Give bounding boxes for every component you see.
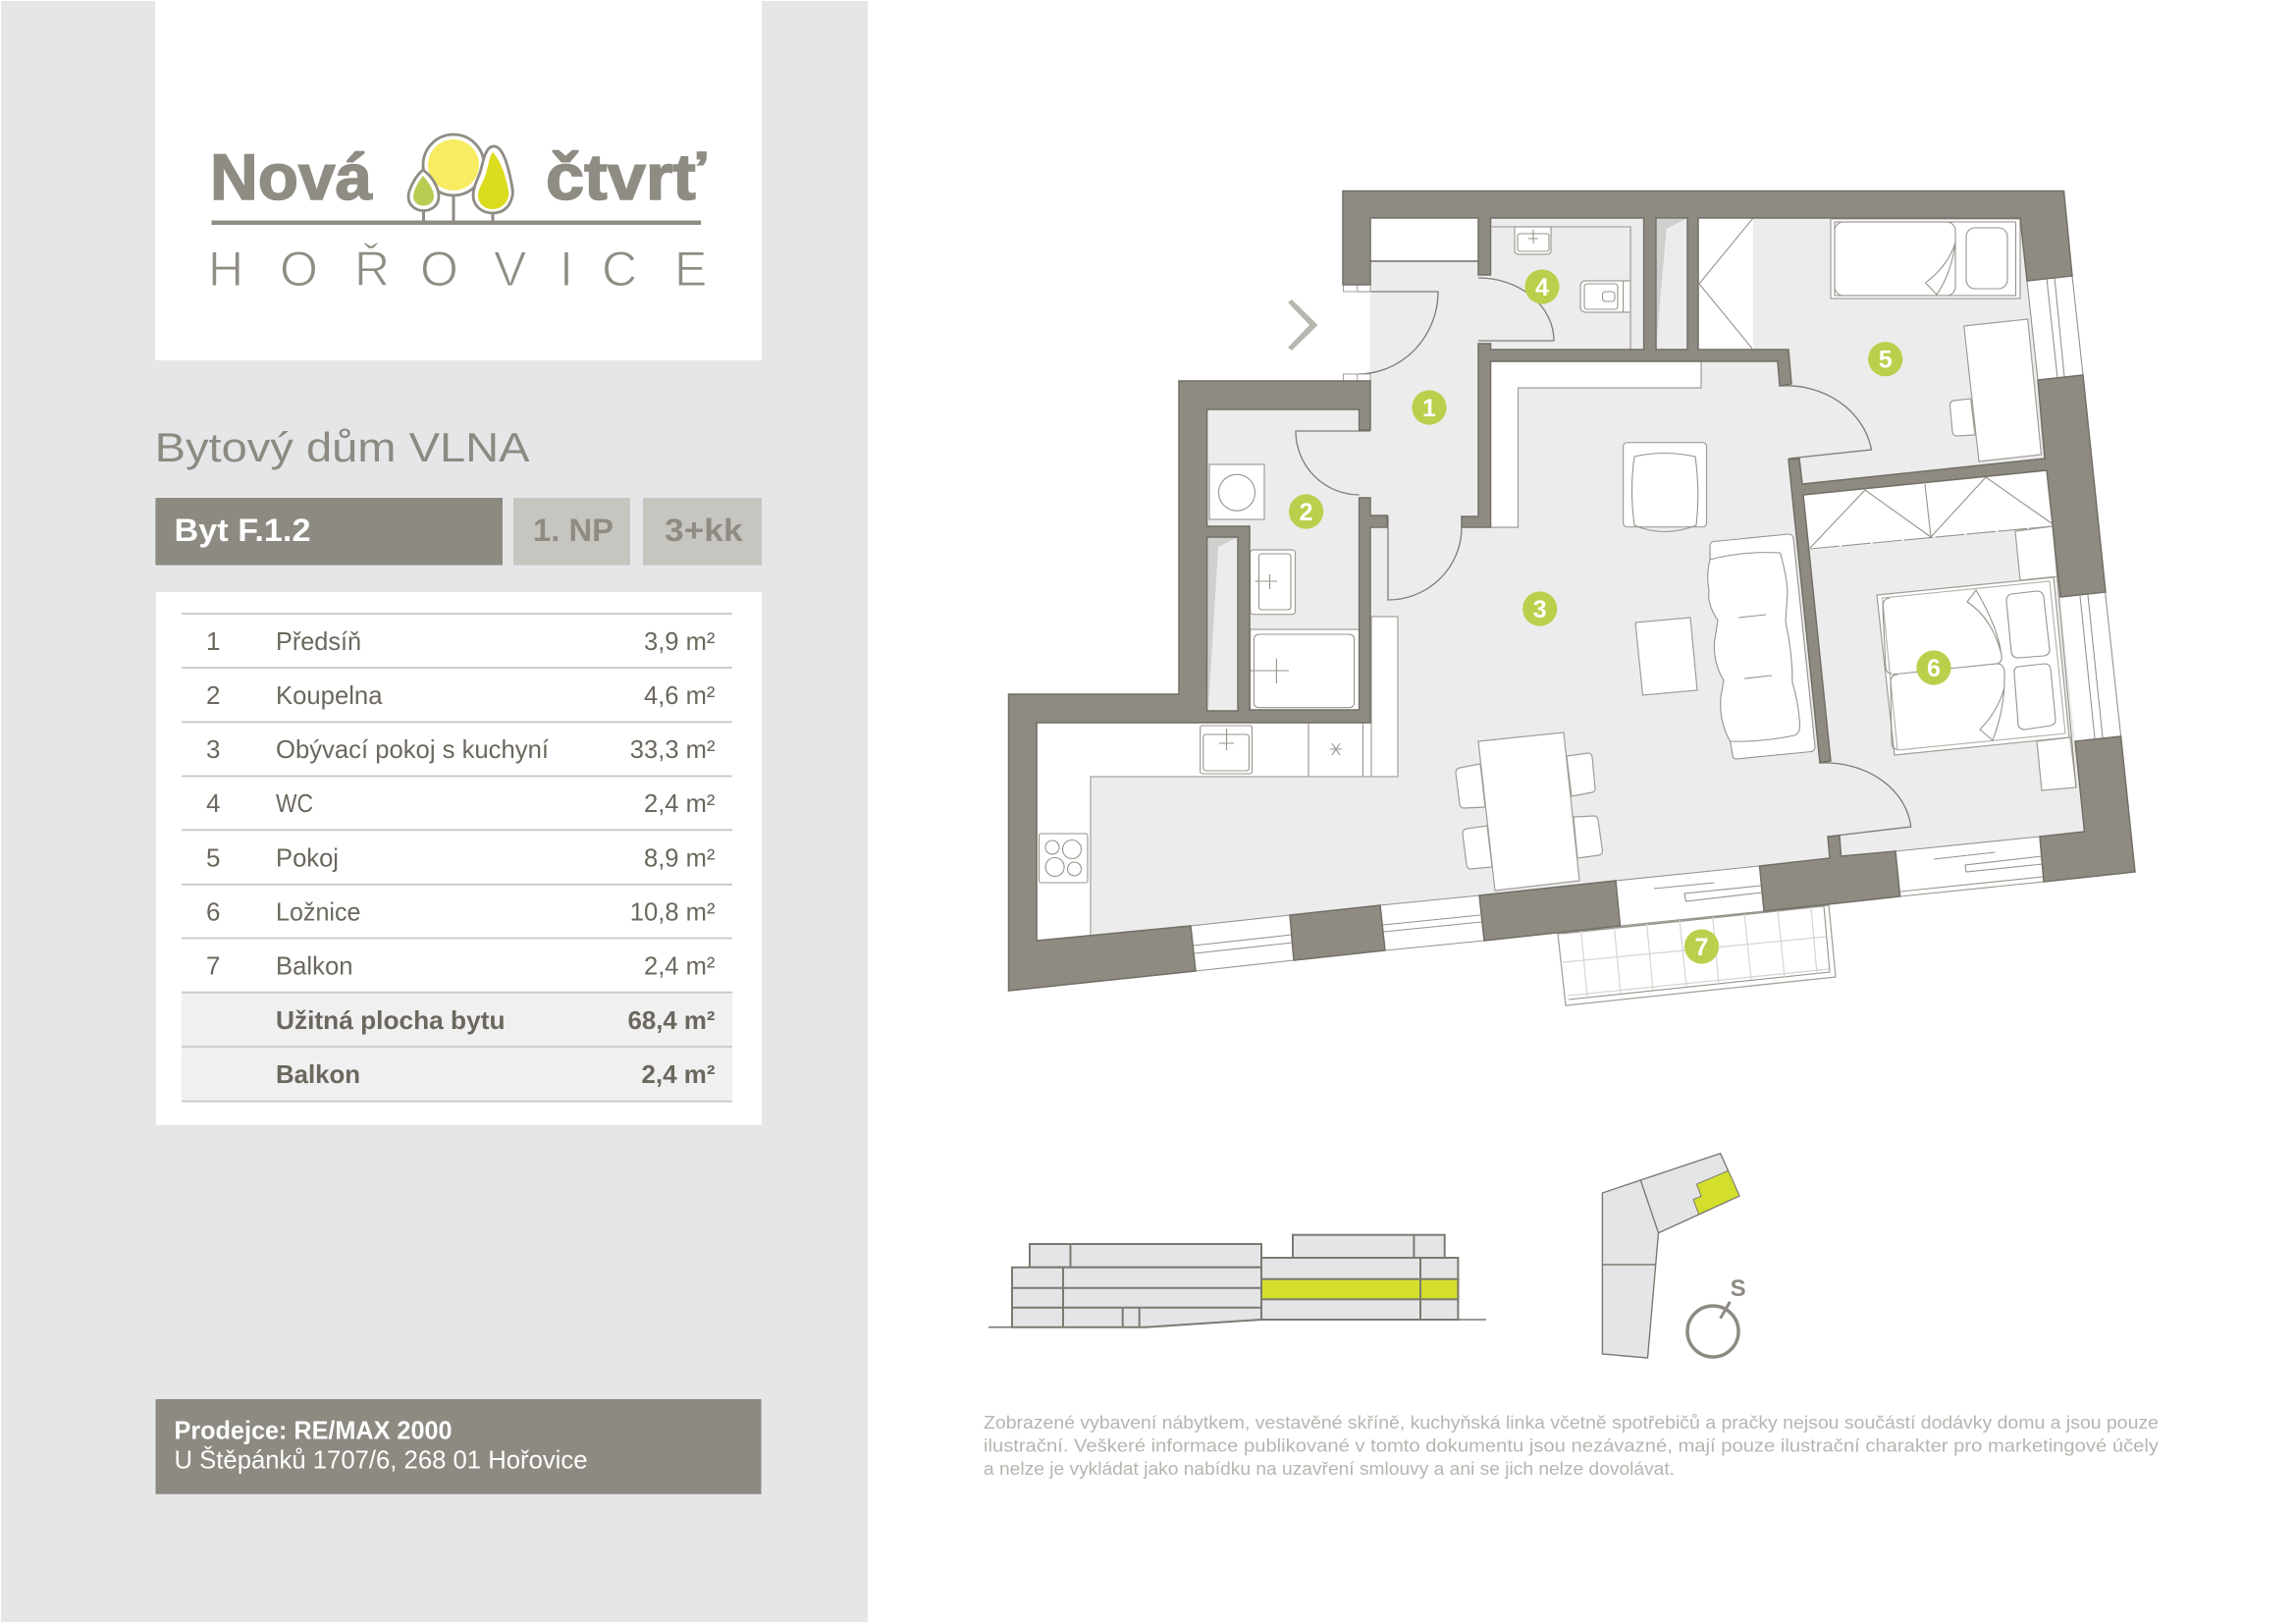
- panel: left sidebar background: [1, 1, 868, 1622]
- floor tag: 1. NP: [533, 513, 614, 548]
- room badge 1: 1: [1422, 395, 1436, 422]
- living room door: [1388, 515, 1462, 600]
- table row 2: Koupelna: [276, 680, 383, 710]
- table row 4: WC: [276, 788, 313, 818]
- table row 1: Předsíň: [276, 626, 361, 656]
- room badge 2: 2: [1300, 499, 1313, 526]
- logo rule: [212, 220, 701, 225]
- disclaimer text: [984, 1412, 2160, 1479]
- panel: seller contact: Prodejce: RE/MAX 2000: [175, 1416, 452, 1445]
- apartment name bar: [155, 498, 503, 566]
- table total: balcony: 2,4 m²: [642, 1059, 716, 1089]
- floor plan: [1009, 190, 2135, 1005]
- room badge 6: [1916, 650, 1951, 685]
- table row 6: [206, 897, 716, 927]
- panel: seller contact: [155, 1399, 762, 1494]
- table row 7: [206, 950, 716, 980]
- room badge 6: 6: [1927, 655, 1941, 682]
- logo word: Hořovice: HOŘOVICE: [208, 242, 707, 297]
- table row 7: 2,4 m²: [644, 950, 716, 980]
- table total: usable area: Užitná plocha bytu: [276, 1005, 505, 1035]
- room badge 3: [1522, 591, 1557, 626]
- shaft fill: [1207, 219, 1686, 710]
- toilet: [1580, 281, 1630, 312]
- room 5 wardrobe: [1698, 218, 1753, 350]
- living room sofa: [1708, 534, 1815, 759]
- layout tag: 3+kk: [665, 513, 743, 548]
- kitchen sink: [1201, 726, 1253, 774]
- room 6 wardrobe: [1803, 471, 2053, 550]
- disclaimer text: ilustrační. Veškeré informace publikované v tomto dokumentu jsou nezávazné, mají pouze ilustrační charakter pro marketingové účely: [984, 1435, 2160, 1455]
- balcony: [1558, 905, 1836, 1005]
- table row 6: 6: [206, 897, 220, 927]
- disclaimer text: a nelze je vykládat jako nabídku na uzavření smlouvy a ani se jich nelze dovolávat.: [984, 1458, 1675, 1479]
- table row 3: [206, 734, 716, 764]
- disclaimer text: Zobrazené vybavení nábytkem, vestavěné skříně, kuchyňská linka včetně spotřebičů a pračky nejsou součástí dodávky domu a jsou pouze: [984, 1412, 2159, 1433]
- table row 5: 8,9 m²: [644, 842, 716, 872]
- kitchen cooktop: [1039, 834, 1088, 883]
- table row 3: Obývací pokoj s kuchyní: [276, 734, 550, 764]
- table row 1: [206, 626, 716, 656]
- table row 7: Balkon: [276, 950, 353, 980]
- table row 2: 4,6 m²: [644, 680, 716, 710]
- room 5 bed: [1831, 219, 2020, 298]
- icon: north compass: [1687, 1275, 1746, 1357]
- bedroom door: [1820, 763, 1911, 837]
- kitchen appliance symbol: [1330, 743, 1342, 755]
- floor tag: [513, 498, 630, 566]
- panel: seller contact: U Štěpánků 1707/6, 268 01 Hořovice: [175, 1445, 587, 1475]
- table total: usable area: 68,4 m²: [628, 1005, 716, 1035]
- icon: trees: [408, 135, 512, 222]
- table row 1: 1: [206, 626, 220, 656]
- room 5 door: [1781, 386, 1871, 459]
- room 6 bedroom furniture: [1877, 526, 2076, 790]
- floor area: [1037, 218, 2085, 941]
- icon: entrance arrow: [1288, 299, 1317, 351]
- room badge 5: 5: [1879, 347, 1893, 374]
- windows: [1191, 276, 2121, 971]
- entrance door: [1343, 285, 1438, 381]
- room badge 7: 7: [1695, 934, 1708, 961]
- table row 6: Ložnice: [276, 897, 361, 927]
- logo word: Nová: Nová: [210, 140, 372, 213]
- table row 4: [206, 788, 716, 818]
- doors: [1296, 278, 1911, 837]
- table total: usable area: [276, 1005, 716, 1035]
- room badge 5: [1868, 342, 1902, 376]
- icon: north compass: S: [1731, 1275, 1746, 1302]
- washing machine: [1209, 464, 1264, 519]
- room badge 2: [1289, 494, 1323, 529]
- room 5 desk and chair: [1949, 319, 2042, 461]
- living room coffee table: [1635, 618, 1697, 695]
- table row 5: Pokoj: [276, 842, 339, 872]
- bathroom door: [1296, 431, 1370, 495]
- WC door: [1478, 278, 1554, 341]
- site plan with highlighted apartment: [1602, 1154, 1739, 1358]
- table row 2: 2: [206, 680, 220, 710]
- table row 4: 2,4 m²: [644, 788, 716, 818]
- building elevation diagram: [988, 1235, 1486, 1327]
- shower tray: [1251, 629, 1360, 711]
- table row 1: 3,9 m²: [644, 626, 716, 656]
- layout tag: [643, 498, 762, 566]
- bathroom fixtures: [1209, 464, 1360, 711]
- room badge 4: [1524, 269, 1560, 304]
- logo word: čtvrť: čtvrť: [546, 140, 706, 213]
- table row 3: 33,3 m²: [630, 734, 716, 764]
- double bed: [1877, 577, 2069, 755]
- table row 5: [206, 842, 716, 872]
- room badge 3: 3: [1533, 596, 1547, 623]
- apartment name bar: Byt F.1.2: [175, 513, 310, 548]
- panel: logo: [155, 0, 762, 360]
- heading: building name: Bytový dům VLNA: [155, 424, 530, 470]
- table row 7: 7: [206, 950, 220, 980]
- table total: balcony: [276, 1059, 716, 1089]
- bathroom basin: [1251, 550, 1296, 615]
- room badge 1: [1412, 390, 1447, 425]
- table total: balcony: Balkon: [276, 1059, 360, 1089]
- table row 4: 4: [206, 788, 220, 818]
- table row 5: 5: [206, 842, 220, 872]
- panel: room area table: [156, 592, 762, 1125]
- walls: [1009, 190, 2135, 991]
- dining table and chairs: [1456, 732, 1602, 891]
- living room armchair: [1624, 443, 1706, 532]
- kitchen counter: [1037, 617, 1398, 941]
- WC fixtures: [1490, 227, 1630, 350]
- WC basin: [1515, 227, 1551, 254]
- room badge 7: [1684, 929, 1719, 964]
- storage niches: [1370, 218, 1701, 527]
- room badge 4: 4: [1535, 274, 1549, 301]
- table row 3: 3: [206, 734, 220, 764]
- table row 6: 10,8 m²: [630, 897, 716, 927]
- table row 2: [206, 680, 716, 710]
